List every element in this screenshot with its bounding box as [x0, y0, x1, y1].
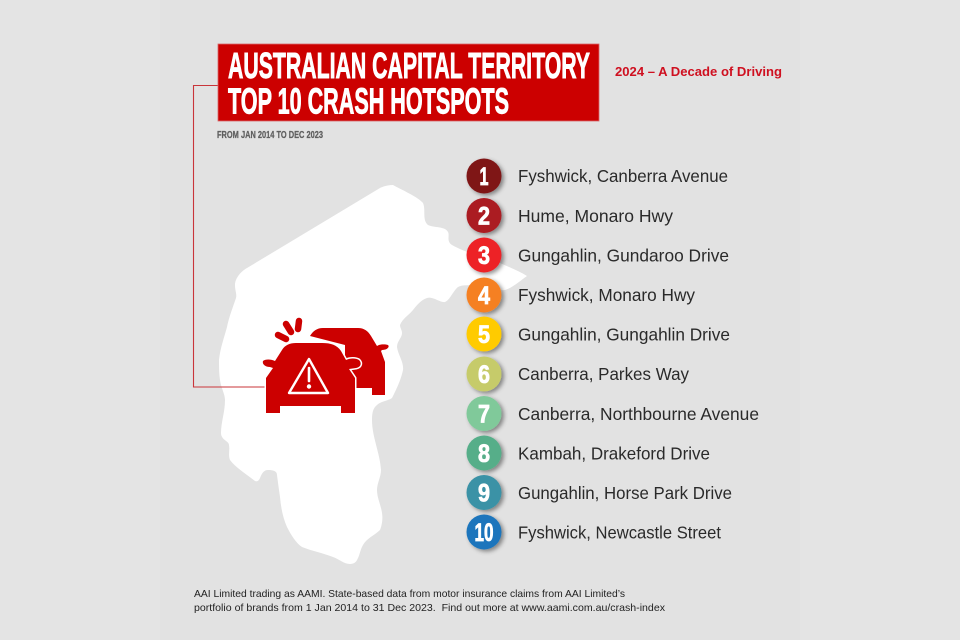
map: ACT silhouette — [219, 185, 527, 564]
item 6 — [466, 356, 689, 392]
icon: impact ticks — [278, 321, 299, 339]
title banner: AUSTRALIAN CAPITAL TERRITORY — [228, 45, 590, 86]
item 7: 7 — [478, 400, 490, 428]
item 5: Gungahlin, Gungahlin Drive — [518, 324, 730, 344]
item 3: Gungahlin, Gundaroo Drive — [518, 246, 729, 266]
icon: exclamation mark — [308, 368, 310, 381]
item 7 — [466, 396, 759, 431]
item 10: 10 — [474, 519, 494, 547]
item 3: 3 — [478, 242, 490, 270]
item 6: Canberra, Parkes Way — [518, 364, 689, 384]
item 1: 1 — [480, 163, 489, 191]
item 8: Kambah, Drakeford Drive — [518, 444, 710, 464]
icon: rear car — [310, 328, 389, 395]
tagline: 2024 – A Decade of Driving — [615, 65, 782, 79]
item 8: 8 — [478, 440, 490, 468]
item 7: Canberra, Northbourne Avenue — [518, 404, 759, 424]
connector line — [194, 86, 266, 387]
footnote: AAI Limited trading as AAMI. State-based data from motor insurance claims from AAI Limited’s — [194, 588, 625, 600]
item 4: Fyshwick, Monaro Hwy — [518, 285, 695, 305]
item 2: 2 — [478, 202, 490, 230]
item 4 — [466, 278, 695, 312]
icon: crashed cars with warning — [263, 321, 389, 413]
item 2: Hume, Monaro Hwy — [518, 206, 673, 226]
item 5 — [466, 316, 730, 352]
item 4: 4 — [478, 282, 490, 310]
item 1 — [466, 158, 728, 194]
item 3 — [466, 238, 729, 272]
icon: front car — [263, 343, 361, 413]
title banner: TOP 10 CRASH HOTSPOTS — [228, 80, 509, 122]
item 9: 9 — [478, 480, 490, 508]
item 5: 5 — [478, 321, 490, 349]
item 6: 6 — [478, 361, 490, 389]
hotspot list — [466, 158, 759, 550]
date range subtitle: FROM JAN 2014 TO DEC 2023 — [217, 129, 323, 141]
item 10: Fyshwick, Newcastle Street — [518, 522, 721, 542]
item 9 — [466, 475, 732, 510]
icon: warning triangle — [289, 359, 328, 393]
item 10 — [466, 514, 721, 550]
item 1: Fyshwick, Canberra Avenue — [518, 166, 728, 186]
item 8 — [466, 436, 710, 470]
item 9: Gungahlin, Horse Park Drive — [518, 483, 732, 503]
footnote — [194, 588, 666, 614]
item 2 — [466, 198, 673, 233]
footnote: portfolio of brands from 1 Jan 2014 to 31 Dec 2023. Find out more at www.aami.com.au/crash-index — [194, 602, 666, 614]
title banner — [218, 44, 599, 122]
